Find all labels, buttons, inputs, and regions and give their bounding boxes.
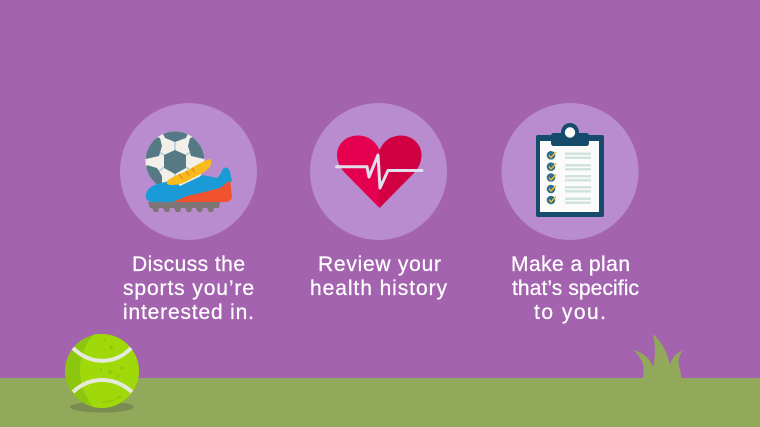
icon: soccer ball (146, 132, 204, 186)
text: review your health history: health history (310, 277, 448, 300)
icon: soccer cleat (146, 159, 232, 212)
text: discuss the sports: Discuss the (132, 253, 245, 276)
icon: grass tuft (633, 334, 683, 379)
panel: make a plan (502, 103, 645, 324)
icon: tennis ball (65, 334, 139, 412)
text: make a plan: Make a plan (511, 253, 630, 276)
text: make a plan: that’s specific (512, 277, 639, 300)
panel: discuss sports (120, 103, 261, 324)
icon circle: health (310, 103, 447, 240)
text: discuss the sports: sports you’re (123, 277, 254, 300)
icon: clipboard (536, 123, 604, 217)
icon circle: plan (502, 103, 638, 240)
text: review your health history: Review your (318, 253, 441, 276)
panel: health history (310, 103, 448, 300)
checklist rows (547, 151, 591, 204)
text: make a plan: to you. (534, 301, 606, 324)
icon circle: sports (120, 103, 257, 240)
ground (0, 378, 760, 427)
icon: heart with pulse (336, 136, 422, 208)
text: discuss the sports: interested in. (123, 301, 254, 324)
